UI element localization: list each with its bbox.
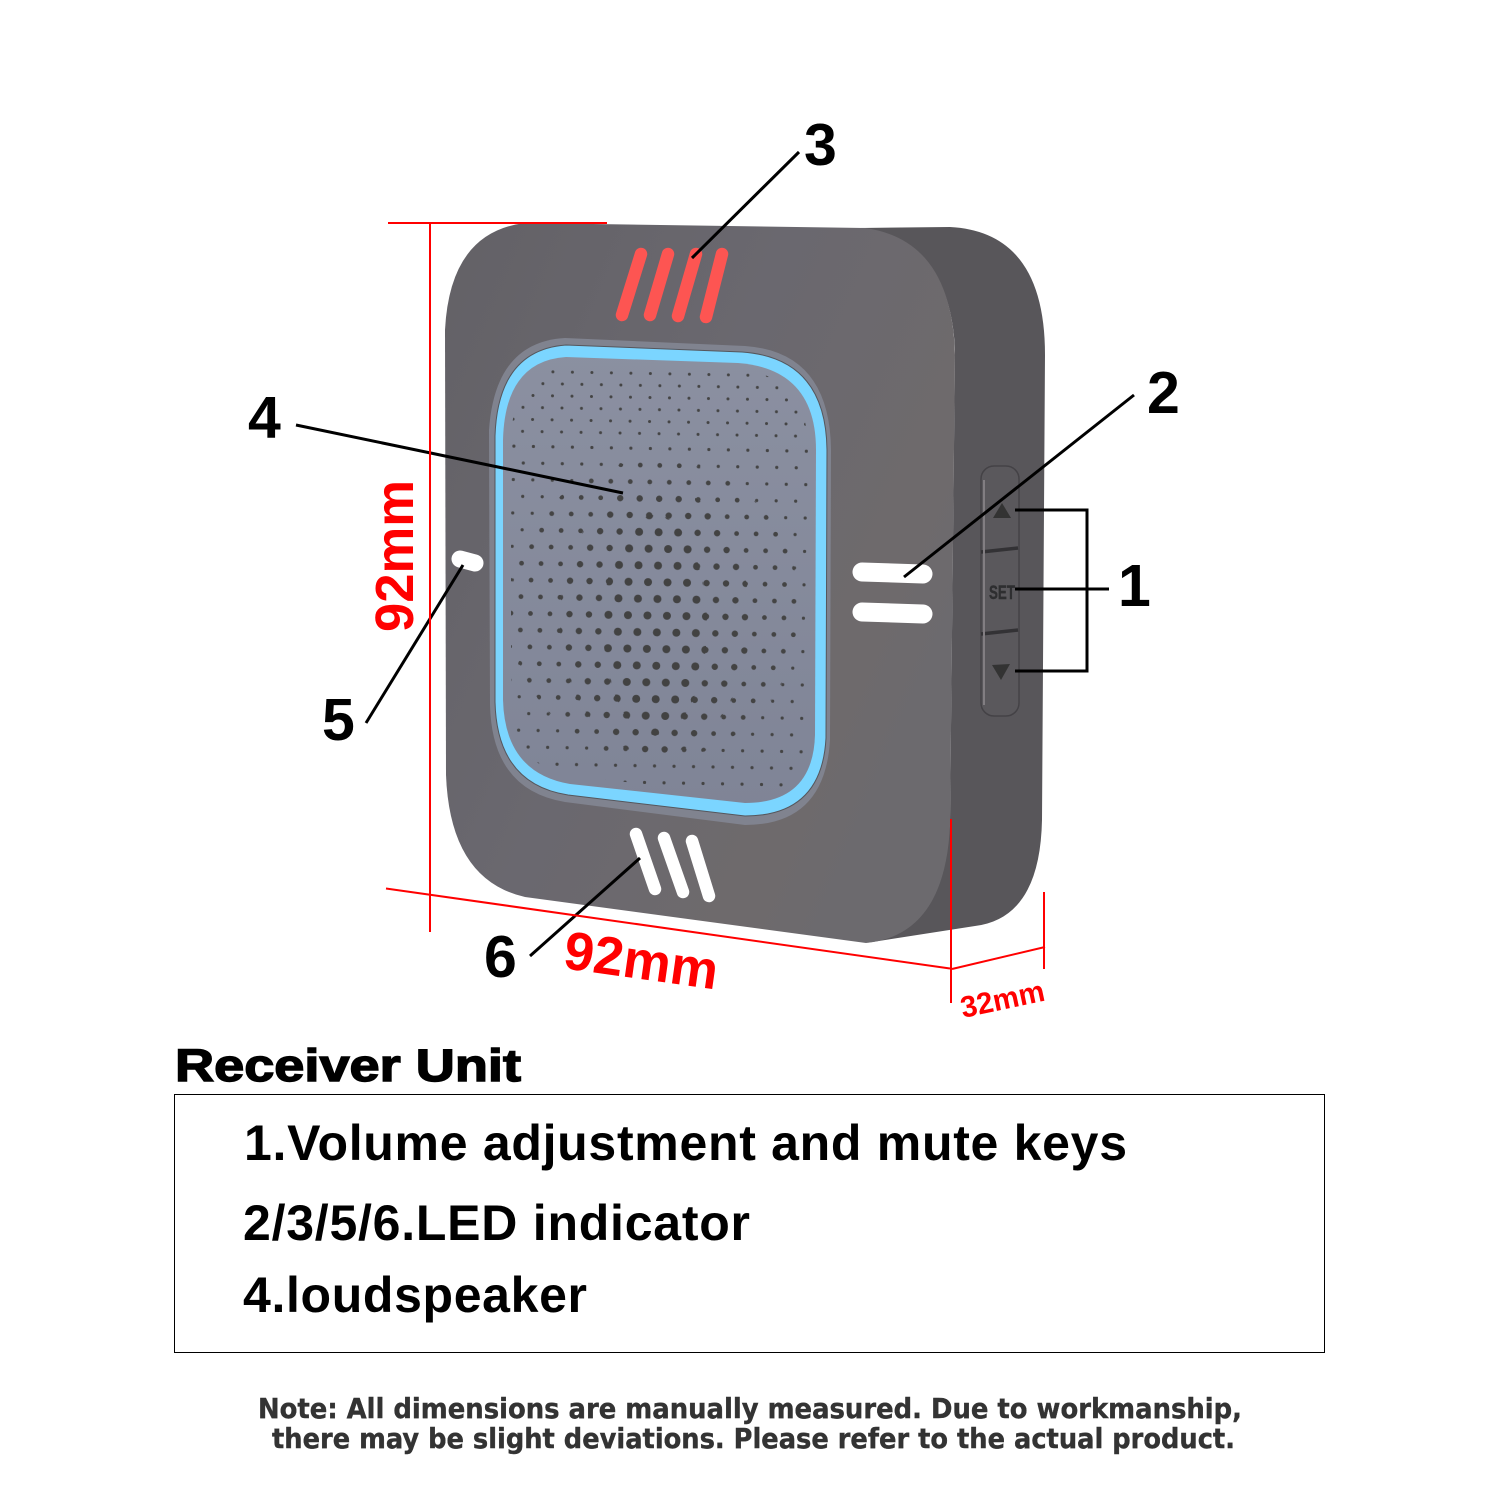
dimension lines <box>386 223 1045 1003</box>
bracket 1 <box>1015 510 1109 671</box>
number 2: 2 <box>1147 360 1180 426</box>
item 2: 2/3/5/6.LED indicator <box>243 1195 750 1251</box>
number 3: 3 <box>804 112 837 178</box>
leader line 5 <box>366 565 463 723</box>
number 5: 5 <box>322 687 355 753</box>
note: there may be slight deviations. Please refer to the actual product. <box>272 1422 1235 1455</box>
dimension label width: 92mm <box>560 920 722 1001</box>
dimension label height: 92mm <box>365 480 425 632</box>
receiver device <box>445 223 1045 943</box>
leader line 4 <box>296 425 623 493</box>
item 3: 4.loudspeaker <box>243 1267 587 1323</box>
leader line 3 <box>692 152 799 258</box>
note <box>258 1392 1242 1455</box>
side buttons: SET <box>989 583 1015 604</box>
white LED left <box>460 559 475 563</box>
white LED bars bottom <box>636 834 709 896</box>
speaker mesh <box>503 357 816 803</box>
note: Note: All dimensions are manually measured. Due to workmanship, <box>258 1392 1242 1425</box>
dimension label depth: 32mm <box>958 975 1048 1025</box>
speaker blue light ring <box>495 345 827 816</box>
speaker surround <box>489 338 831 825</box>
number 6: 6 <box>484 924 517 990</box>
number 1: 1 <box>1118 553 1151 619</box>
leader line 2 <box>904 395 1134 577</box>
side buttons <box>981 466 1019 716</box>
red LED bars <box>622 254 722 317</box>
item 1: 1.Volume adjustment and mute keys <box>244 1115 1127 1171</box>
heading: Receiver Unit <box>175 1040 521 1091</box>
leader line 6 <box>530 858 640 956</box>
description box <box>174 1094 1324 1352</box>
device side face <box>860 227 1045 943</box>
number 4: 4 <box>248 385 281 451</box>
device front face <box>445 223 955 943</box>
white LED bars right <box>862 572 923 614</box>
